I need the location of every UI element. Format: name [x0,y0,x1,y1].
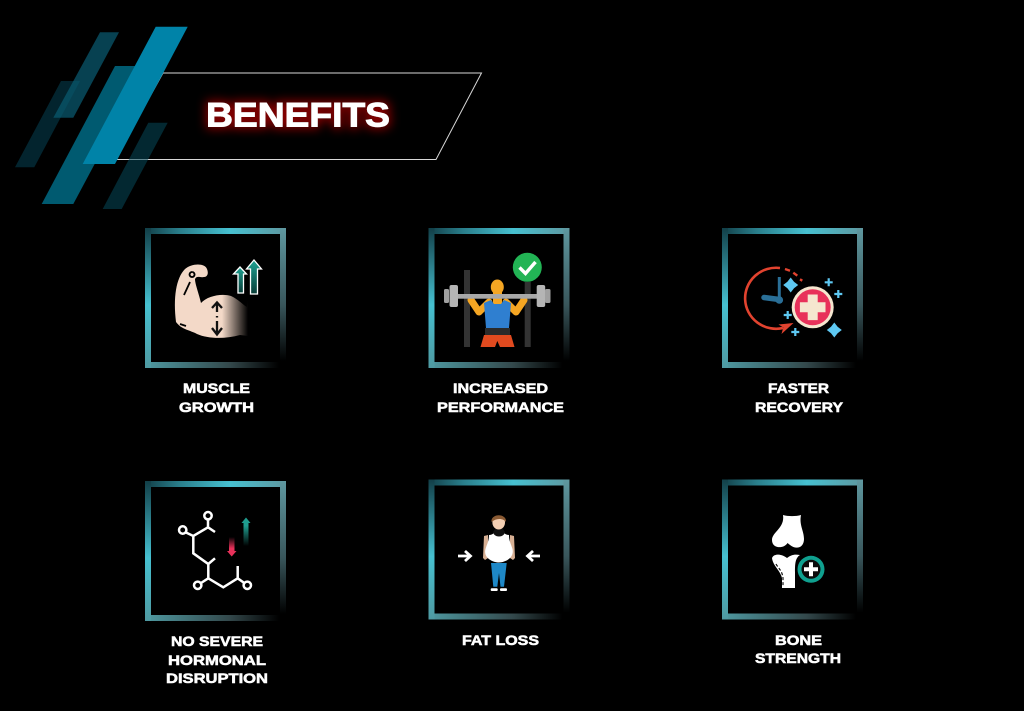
slanted bar: middle [42,66,147,204]
icon: person with belly [458,515,540,591]
label: HORMONAL [168,653,266,669]
icon: weightlifter [444,253,550,347]
icon: up and down arrows [227,518,250,556]
label: GROWTH [179,400,254,416]
icon: hormone molecule [179,512,251,589]
label [166,634,268,687]
title: BENEFITS [206,96,390,134]
frame [145,481,286,621]
frame [722,228,863,368]
label [179,381,254,416]
label [755,381,844,416]
icon: sparkles [783,278,842,338]
icon: growth arrows [234,267,246,293]
label: FASTER [768,381,829,397]
panel: no severe hormonal disruption [145,481,286,687]
title outline parallelogram [115,73,482,160]
header banner [15,27,482,209]
label: BONE [775,633,822,649]
slanted bar: lower right [103,123,168,209]
panel: faster recovery [722,228,863,416]
label [437,381,564,416]
label: DISRUPTION [166,671,268,687]
label: FAT LOSS [462,633,539,649]
label: RECOVERY [755,400,844,416]
icon: flexed bicep [175,260,262,338]
frame [428,228,570,368]
panel: bone strength [722,480,863,667]
slanted bar: bright [83,27,188,164]
panel: fat loss [428,480,570,649]
slanted bar: upper left [53,32,119,118]
label: NO SEVERE [171,634,263,650]
frame [428,480,570,620]
icon: green check badge [513,253,542,282]
label: INCREASED [453,381,548,397]
icon: plus badge [798,556,824,583]
label: MUSCLE [183,381,250,397]
label: PERFORMANCE [437,400,564,416]
panel: muscle growth [145,228,286,416]
slanted bar: far left [15,81,80,167]
icon: knee joint bones [772,515,824,588]
label: STRENGTH [755,651,841,667]
icon: inward arrows [458,551,540,561]
panel: increased performance [428,228,570,416]
frame [722,480,863,620]
icon: clock and medical cross [745,268,842,338]
label [755,633,841,667]
frame [145,228,286,368]
